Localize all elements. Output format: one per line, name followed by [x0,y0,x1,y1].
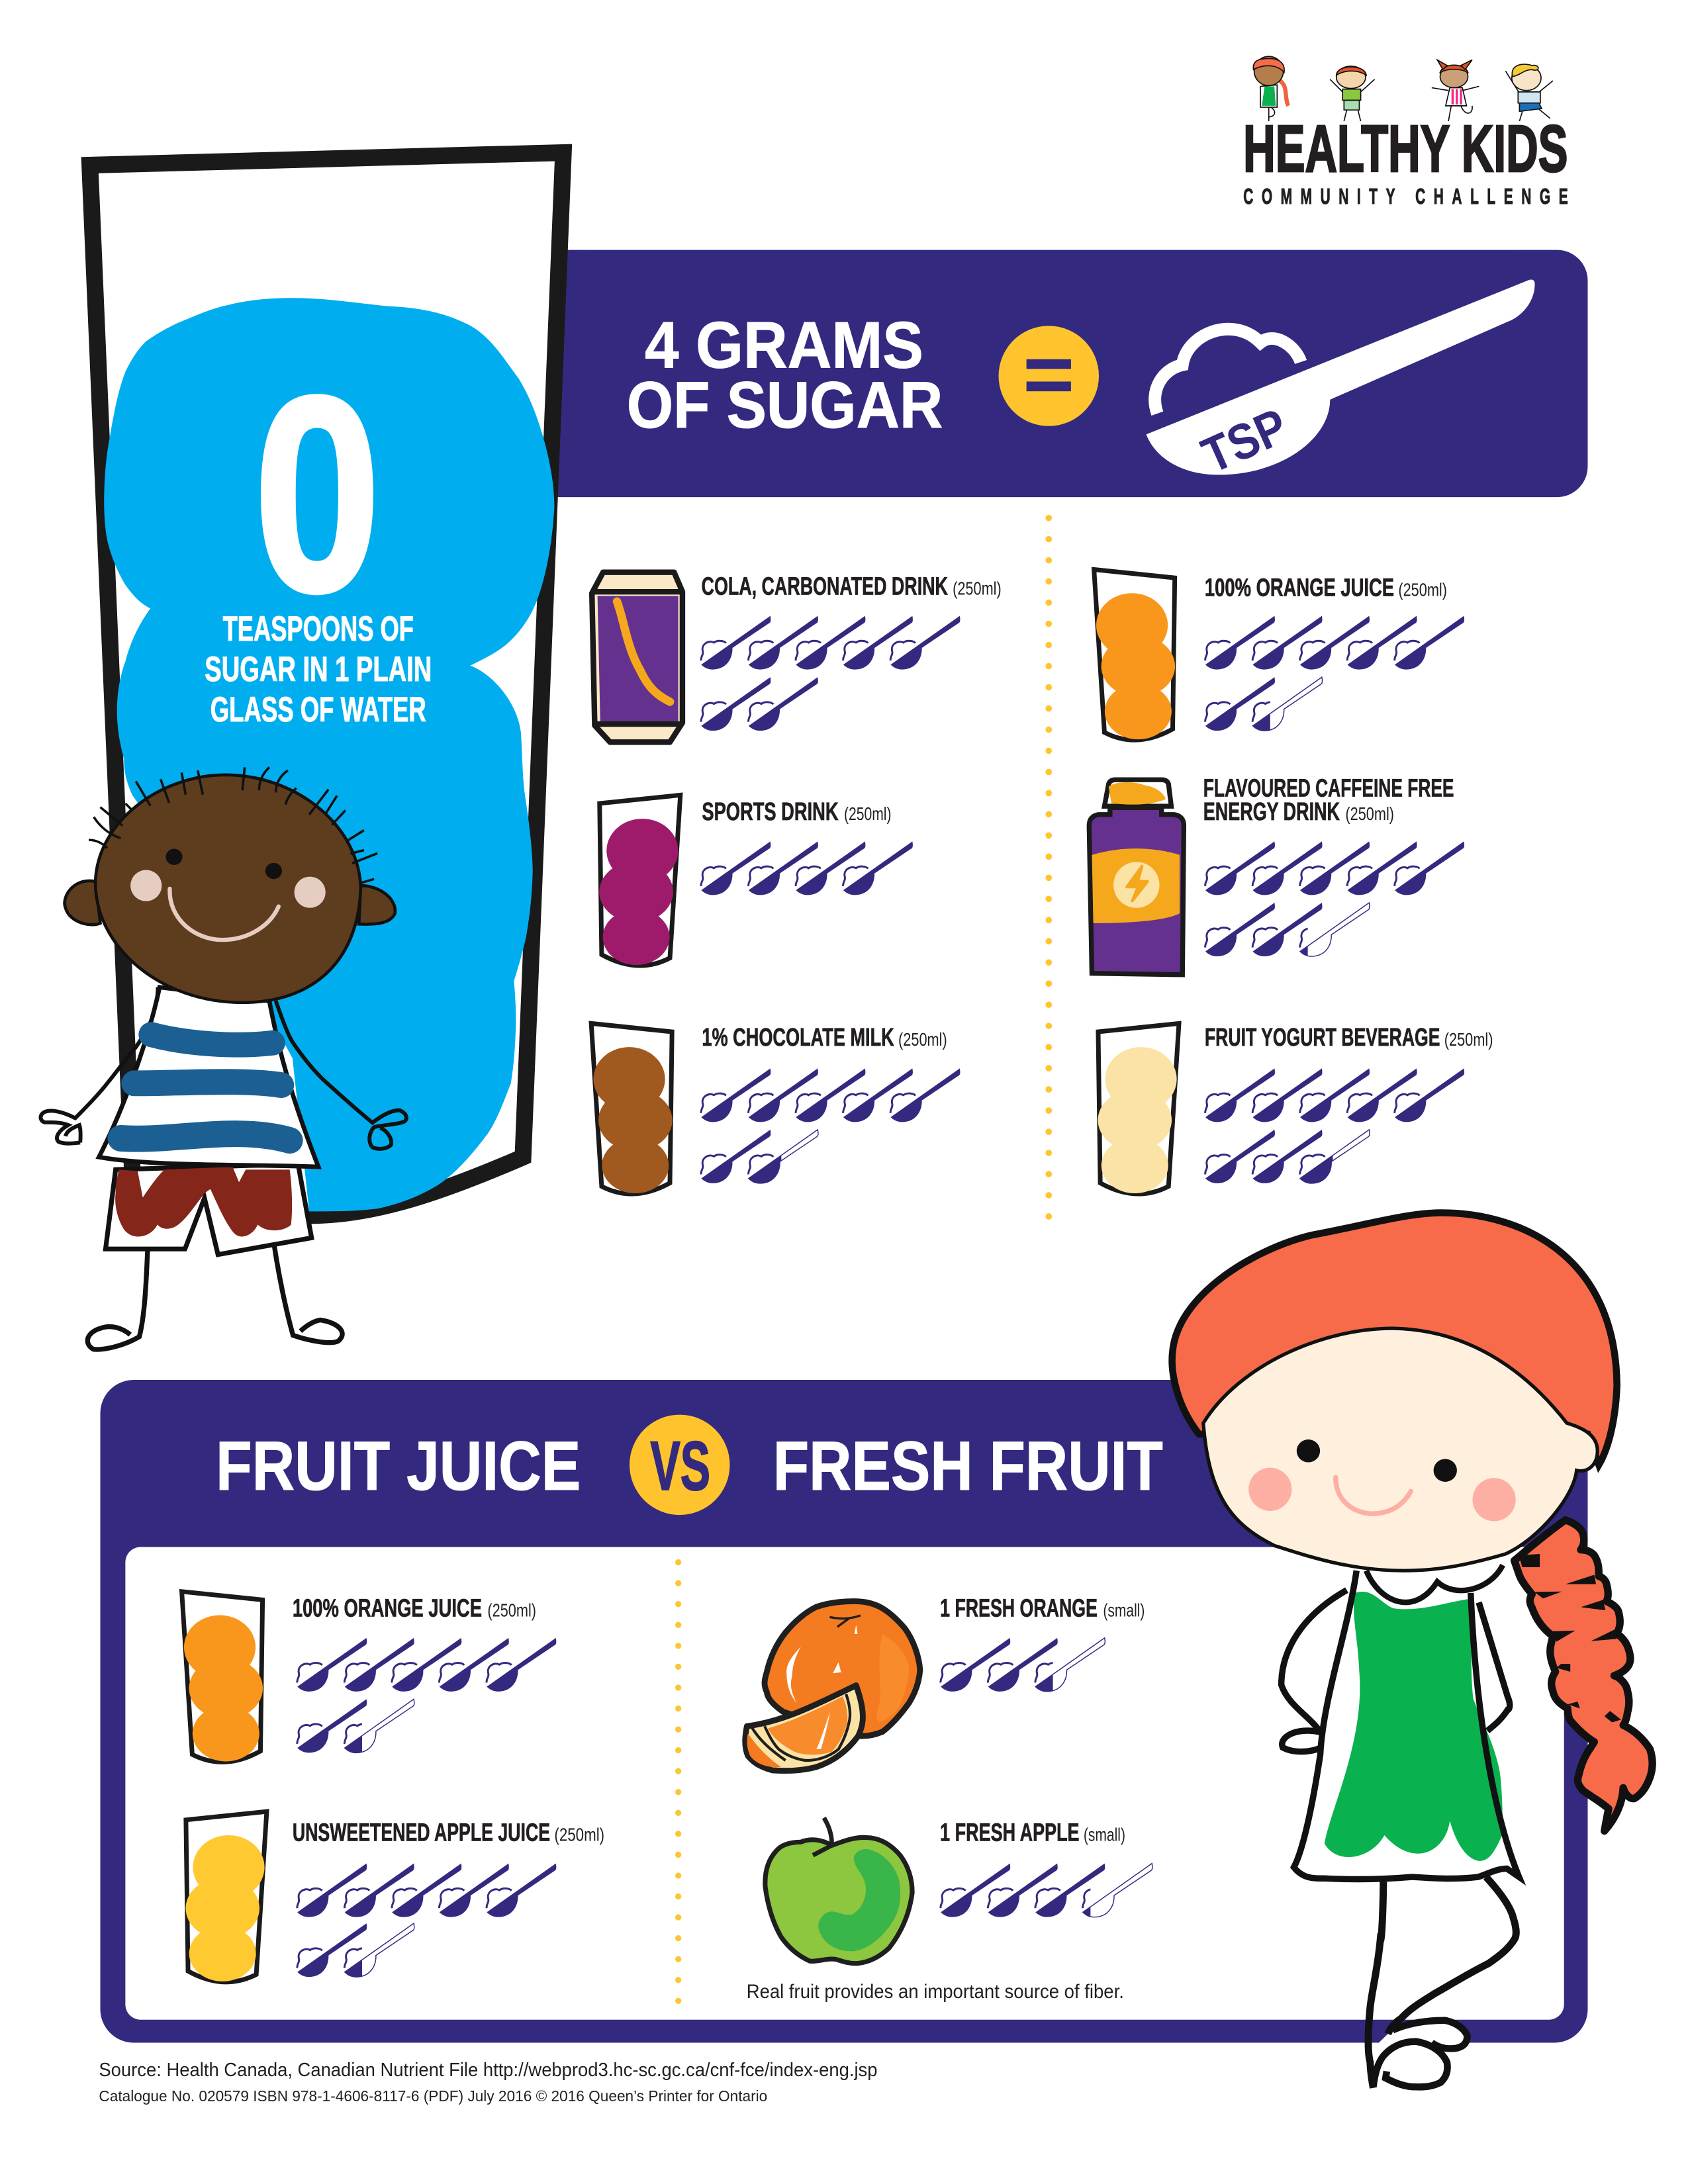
girl legs and shoe [1368,1877,1516,2088]
spoons: about 7.3 teaspoons [1205,841,1464,956]
item: orange juice [1094,570,1464,740]
logo kid: boy in green [1330,66,1375,121]
divider: top dotted line [1047,518,1051,1225]
label: energy drink: ENERGY DRINK [1203,798,1340,826]
label: energy drink: FLAVOURED CAFFEINE FREE [1203,774,1454,802]
boy shorts pattern [115,1167,292,1237]
spoons: 4 teaspoons [701,841,913,895]
label: orange juice: 100% ORANGE JUICE [1205,574,1394,602]
boy hair [89,767,377,884]
girl braid [1515,1520,1652,1831]
girl face [1203,1328,1597,1570]
heading: 4 grams of sugar [627,308,943,441]
item: fresh orange [745,1595,1145,1771]
icon: energy drink bottle [1089,780,1184,975]
heading: fresh fruit: FRESH FRUIT [773,1428,1163,1505]
boy shirt [99,987,318,1167]
illustration: tall glass of water [90,153,563,1216]
panel: fruit juice vs fresh fruit [101,1380,1587,2042]
spoons: about 2.5 teaspoons [941,1638,1105,1692]
character: boy [40,767,406,1349]
logo tagline: COMMUNITY CHALLENGE [1243,184,1568,208]
label: apple juice: (250ml) [554,1824,604,1844]
label: fresh orange: (small) [1103,1600,1145,1621]
caption: teaspoons of sugar in water: GLASS OF WATER [211,690,426,729]
boy shorts [106,1164,312,1255]
item: cola [592,572,1002,742]
character: girl [1172,1213,1652,2088]
girl arms [1282,1590,1510,1752]
boy arms [40,987,406,1149]
item: chocolate milk [591,1023,960,1194]
icon: sports drink glass [599,795,680,966]
spoons: about 7 teaspoons [701,1068,960,1183]
heading: 4 grams of sugar: 4 GRAMS [645,308,923,381]
label: orange juice: (250ml) [487,1600,536,1621]
item: apple juice comparison [185,1811,604,1982]
spoons: about 3.7 teaspoons [941,1864,1152,1917]
panel: 4 grams of sugar banner [530,250,1587,497]
logo: Healthy Kids Community Challenge [1243,56,1568,208]
label: cola: (250ml) [953,578,1002,598]
label: fruit yogurt: (250ml) [1444,1029,1493,1050]
icon: versus badge [630,1415,729,1515]
item: energy drink [1089,774,1464,975]
caption: teaspoons of sugar in water [205,610,432,729]
logo kid: girl with pigtails [1432,60,1479,121]
note: real fruit fiber: Real fruit provides an important source of fiber. [747,1981,1124,2003]
spoons: about 8 teaspoons [1205,1068,1464,1183]
item: fresh apple [765,1818,1152,1964]
water fill [104,298,554,1211]
label: fresh apple: (small) [1084,1824,1125,1844]
icon: orange with wedge [745,1602,920,1771]
catalogue line: Catalogue No. 020579 ISBN 978-1-4606-8117-6 (PDF) July 2016 © 2016 Queen’s Printer for Ontario [99,2087,767,2105]
girl dress [1294,1565,1519,1880]
label: apple juice: UNSWEETENED APPLE JUICE [293,1819,550,1846]
divider: bottom dotted line [677,1563,680,2005]
spoons: about 6.5 teaspoons [1205,616,1464,731]
label: orange juice: 100% ORANGE JUICE [293,1595,482,1623]
label: orange juice: (250ml) [1398,579,1447,600]
caption: teaspoons of sugar in water: TEASPOONS OF [223,610,414,649]
label: sports drink: SPORTS DRINK [702,798,839,826]
label: cola: COLA, CARBONATED DRINK [702,572,948,600]
label: sports drink: (250ml) [844,803,892,824]
spoons: 7 teaspoons [701,616,960,731]
panel inner white area [125,1547,1564,2020]
icon: versus badge: VS [651,1428,710,1505]
orange wedge [745,1686,863,1771]
big zero: 0 [254,339,381,650]
icon: teaspoon [1147,279,1535,484]
label: fruit yogurt: FRUIT YOGURT BEVERAGE [1205,1024,1440,1052]
icon: green apple [765,1818,912,1964]
heading: fruit juice: FRUIT JUICE [216,1428,581,1505]
logo kid: boy with yellow hair [1505,64,1553,121]
logo kid: girl with braid [1253,56,1288,121]
boy head [65,767,395,1003]
item: orange juice comparison [182,1592,556,1762]
icon: teaspoon: TSP [1194,398,1295,484]
label: fresh orange: 1 FRESH ORANGE [940,1595,1098,1623]
item: sports drink [599,795,913,966]
icon: yogurt glass [1098,1023,1179,1194]
icon: chocolate milk glass [591,1023,673,1194]
source line: Source: Health Canada, Canadian Nutrient File http://webprod3.hc-sc.gc.ca/cnf-fce/index-eng.jsp [99,2060,877,2081]
spoons: about 6.5 teaspoons [297,1864,556,1977]
orange body [765,1602,920,1736]
item: fruit yogurt beverage [1098,1023,1493,1194]
icon: orange juice glass [1094,570,1175,740]
icon: equals sign [999,326,1099,426]
caption: teaspoons of sugar in water: SUGAR IN 1 PLAIN [205,650,432,689]
spoons: about 6.5 teaspoons [297,1638,556,1752]
icon: apple juice glass [185,1811,267,1982]
boy legs and feet [87,1246,342,1349]
girl hair [1172,1213,1617,1465]
label: chocolate milk: 1% CHOCOLATE MILK [702,1024,894,1052]
label: energy drink [1203,774,1454,826]
icon: cola can [592,572,682,742]
label: energy drink: (250ml) [1345,803,1394,824]
icon: orange juice glass [182,1592,263,1762]
heading: 4 grams of sugar: OF SUGAR [627,368,943,441]
label: chocolate milk: (250ml) [898,1029,947,1050]
label: fresh apple: 1 FRESH APPLE [940,1819,1080,1846]
